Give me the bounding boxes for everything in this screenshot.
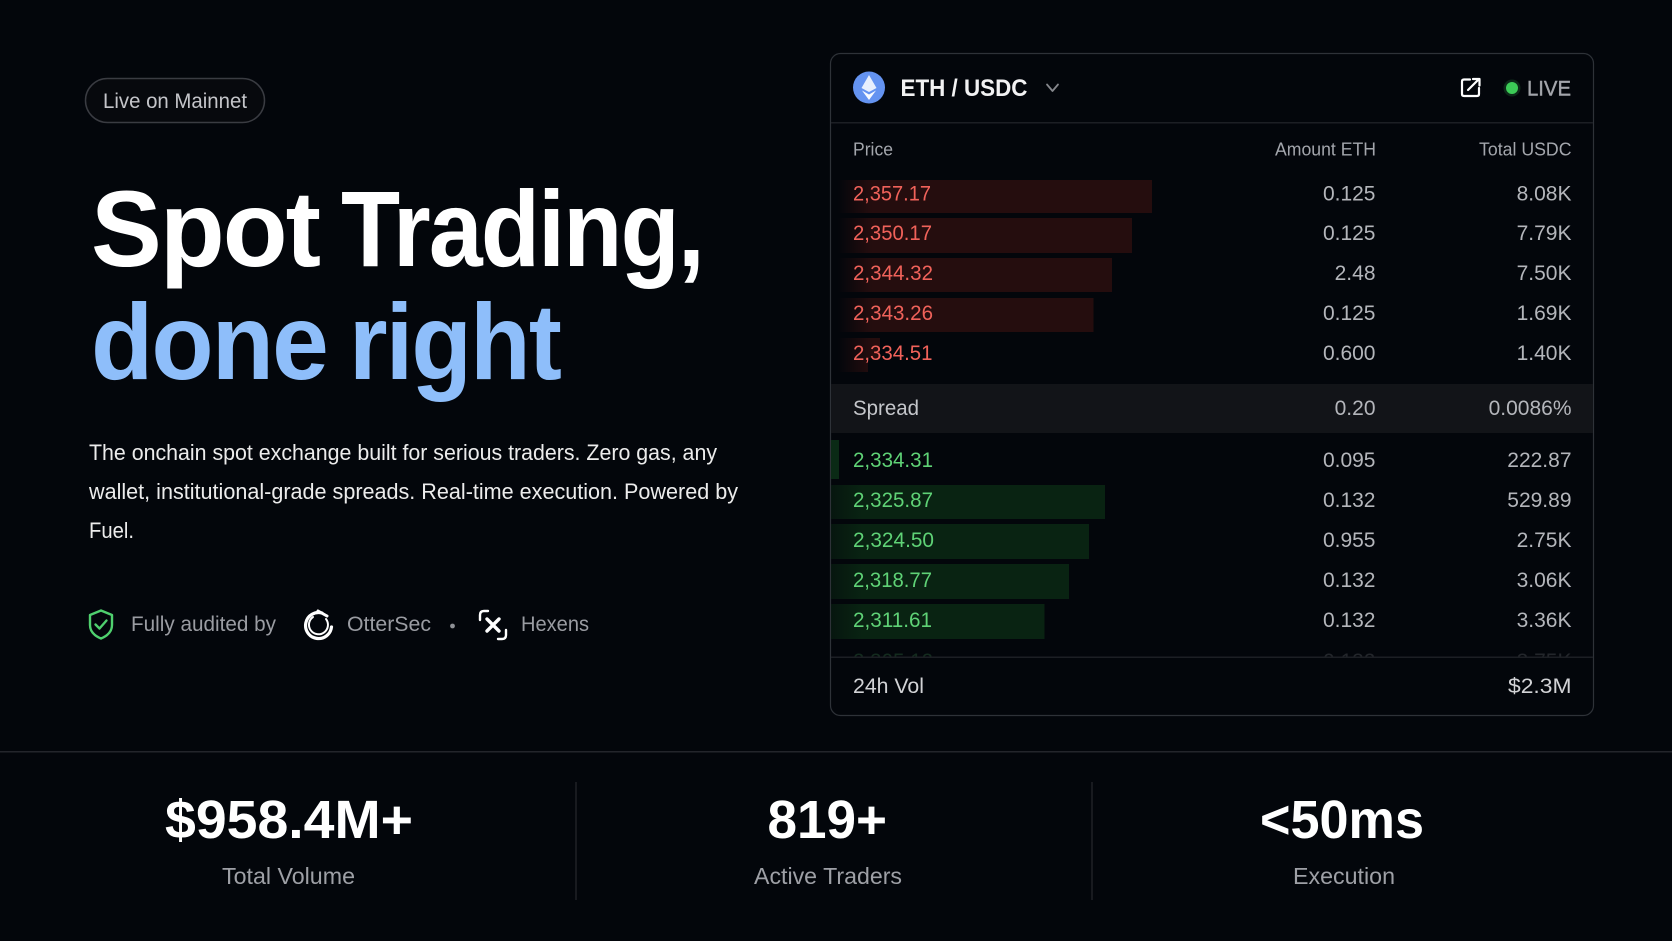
description text: [88, 440, 738, 543]
Hexens name: Hexens: [521, 613, 589, 636]
ask totals: 1.69K: [1517, 302, 1572, 325]
title: Trading,: [341, 168, 703, 289]
icon: Hexens: [480, 611, 506, 639]
description text: wallet, institutional-grade spreads. Real-time execution. Powered by: [88, 479, 738, 504]
icon: OtterSec: [306, 611, 332, 639]
bid amounts: 0.095: [1323, 449, 1376, 472]
bid prices: 2,324.50: [853, 529, 934, 552]
ask depth bars: [838, 180, 1152, 372]
bid prices: 2,311.61: [853, 609, 932, 632]
description text: Fuel.: [89, 518, 134, 543]
stat: total volume: [165, 790, 413, 889]
audit row: [90, 610, 589, 639]
icon: external link: [1462, 79, 1480, 96]
bid amounts: 0.132: [1323, 609, 1376, 632]
stat: active traders: Active Traders: [754, 863, 902, 889]
bid totals: 529.89: [1507, 489, 1572, 512]
ask amounts: 2.48: [1335, 262, 1376, 285]
bid depth bars: [831, 440, 1105, 639]
column headers: [853, 140, 1572, 160]
stat: execution: Execution: [1293, 863, 1395, 889]
separator dot: [450, 624, 455, 628]
stats row: [165, 782, 1424, 900]
badge: Live on Mainnet: Live on Mainnet: [103, 90, 247, 113]
stat: execution: <50ms: [1260, 790, 1424, 850]
bid amounts: [1323, 449, 1376, 632]
bid prices: [853, 449, 934, 632]
stat: active traders: 819+: [768, 790, 887, 850]
asks rows: [838, 180, 1572, 372]
ask prices: 2,357.17: [853, 183, 931, 206]
icon: green shield: [90, 610, 112, 638]
ask prices: 2,334.51: [853, 342, 932, 365]
bid totals: 3.06K: [1517, 569, 1572, 592]
title: [91, 168, 703, 402]
spread row: [831, 384, 1593, 433]
title: right: [349, 281, 561, 402]
ask amounts: 0.125: [1323, 302, 1376, 325]
ask totals: 7.79K: [1517, 222, 1572, 245]
bid amounts: 0.955: [1323, 529, 1376, 552]
title: Spot: [91, 168, 320, 289]
panel: order book: [830, 54, 1594, 716]
24h volume footer: $2.3M: [1508, 675, 1572, 698]
24h volume footer: 24h Vol: [853, 675, 924, 698]
bid totals: 2.75K: [1517, 529, 1572, 552]
clipped next row: 3.75K: [1517, 650, 1572, 673]
bid totals: 222.87: [1507, 449, 1572, 472]
ask totals: 7.50K: [1517, 262, 1572, 285]
bid totals: 3.36K: [1517, 609, 1572, 632]
stat: total volume: $958.4M+: [165, 790, 413, 850]
bid prices: 2,334.31: [853, 449, 933, 472]
stat: execution: [1260, 790, 1424, 889]
stat: active traders: [754, 790, 902, 889]
24h volume footer: [853, 675, 1572, 698]
clipped next row: 0.132: [1323, 650, 1376, 673]
title: done: [91, 281, 327, 402]
ask prices: 2,343.26: [853, 302, 933, 325]
ask amounts: 0.125: [1323, 222, 1376, 245]
bid prices: 2,318.77: [853, 569, 932, 592]
ask amounts: [1323, 183, 1376, 365]
ask amounts: 0.125: [1323, 183, 1376, 206]
ask totals: [1517, 183, 1572, 365]
stat: total volume: Total Volume: [222, 863, 355, 889]
ask totals: 8.08K: [1517, 183, 1572, 206]
column headers: Total USDC: [1479, 140, 1572, 160]
ask prices: 2,344.32: [853, 262, 933, 285]
pair name: ETH / USDC: [900, 75, 1028, 102]
live label: LIVE: [1527, 78, 1571, 100]
ask totals: 1.40K: [1517, 342, 1572, 365]
live status dot: [1504, 80, 1520, 96]
spread row: 0.0086%: [1489, 397, 1572, 420]
icon: Ethereum: [853, 72, 885, 104]
description text: The onchain spot exchange built for serious traders. Zero gas, any: [89, 440, 717, 465]
spread row: 0.20: [1335, 397, 1376, 420]
bid amounts: 0.132: [1323, 489, 1376, 512]
clipped next row: 2,305.12: [853, 650, 933, 673]
ask amounts: 0.600: [1323, 342, 1376, 365]
column headers: Price: [853, 140, 893, 160]
audited by label: Fully audited by: [131, 613, 276, 636]
bid totals: [1507, 449, 1572, 632]
bid amounts: 0.132: [1323, 569, 1376, 592]
OtterSec name: OtterSec: [347, 613, 431, 636]
order book header: [853, 72, 1571, 104]
column headers: Amount ETH: [1275, 140, 1376, 160]
badge: Live on Mainnet: [86, 78, 264, 122]
ask prices: [853, 183, 933, 365]
ask prices: 2,350.17: [853, 222, 932, 245]
bid prices: 2,325.87: [853, 489, 933, 512]
bids rows: [831, 440, 1572, 673]
icon: chevron: [1047, 84, 1058, 91]
clipped next row: [854, 654, 1570, 656]
spread row: Spread: [853, 397, 919, 420]
